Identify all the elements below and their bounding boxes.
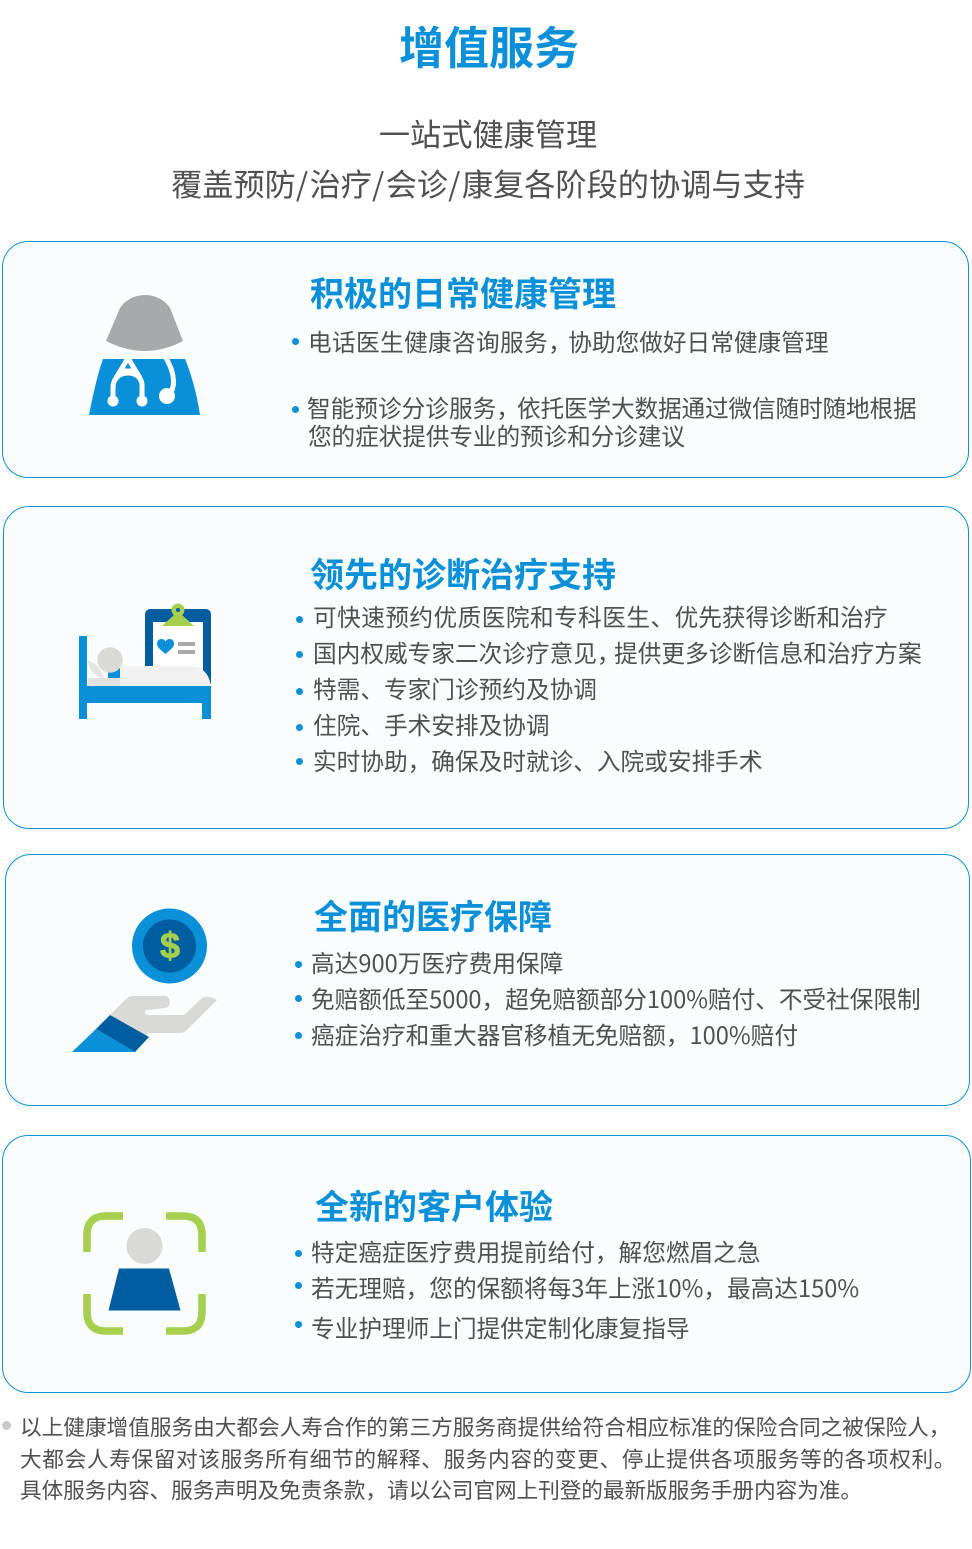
icon: hand with coin: $ bbox=[160, 925, 180, 966]
list: diagnosis and treatment: 住院、手术安排及协调 bbox=[313, 707, 550, 741]
footnote: 大都会人寿保留对该服务所有细节的解释、服务内容的变更、停止提供各项服务等的各项权利。 bbox=[20, 1442, 956, 1474]
subtitle: 覆盖预防/治疗/会诊/康复各阶段的协调与支持 bbox=[171, 160, 805, 205]
list: customer experience bbox=[295, 1234, 859, 1344]
panel: diagnosis and treatment bbox=[3, 506, 969, 829]
panel: customer experience bbox=[2, 1135, 971, 1393]
panel: daily health management bbox=[2, 241, 969, 478]
icon: patient in bed bbox=[79, 604, 211, 719]
icon: doctor bbox=[89, 295, 200, 415]
list: medical coverage: 免赔额低至5000，超免赔额部分100%赔付、不受社保限制 bbox=[311, 981, 921, 1015]
heading: medical coverage: 全面的医疗保障 bbox=[314, 890, 552, 939]
list: diagnosis and treatment: 可快速预约优质医院和专科医生、优先获得诊断和治疗 bbox=[313, 599, 888, 633]
icon: person in frame bbox=[83, 1212, 206, 1335]
list: diagnosis and treatment: 特需、专家门诊预约及协调 bbox=[313, 671, 597, 705]
list: customer experience: 若无理赔，您的保额将每3年上涨10%，最高达150% bbox=[311, 1270, 859, 1304]
list: customer experience: 专业护理师上门提供定制化康复指导 bbox=[311, 1310, 690, 1344]
list: diagnosis and treatment bbox=[296, 599, 922, 777]
list: daily health management: 智能预诊分诊服务，依托医学大数据通过微信随时随地根据 bbox=[307, 390, 917, 424]
heading: customer experience: 全新的客户体验 bbox=[315, 1180, 553, 1229]
heading: diagnosis and treatment: 领先的诊断治疗支持 bbox=[310, 548, 616, 597]
subtitle bbox=[171, 110, 805, 205]
footnote bbox=[20, 1411, 956, 1505]
list: medical coverage bbox=[295, 945, 921, 1051]
footnote: 具体服务内容、服务声明及免责条款，请以公司官网上刊登的最新版服务手册内容为准。 bbox=[20, 1474, 862, 1505]
list: daily health management: 电话医生健康咨询服务，协助您做好日常健康管理 bbox=[308, 324, 828, 358]
list: medical coverage: 高达900万医疗费用保障 bbox=[311, 945, 563, 979]
list: daily health management bbox=[292, 324, 917, 452]
list: daily health management: 您的症状提供专业的预诊和分诊建议 bbox=[308, 418, 685, 452]
list: diagnosis and treatment: 实时协助，确保及时就诊、入院或安排手术 bbox=[313, 743, 762, 777]
panel: medical coverage bbox=[5, 854, 970, 1106]
heading: daily health management: 积极的日常健康管理 bbox=[310, 267, 616, 316]
list: customer experience: 特定癌症医疗费用提前给付，解您燃眉之急 bbox=[311, 1234, 760, 1268]
footnote bullet bbox=[2, 1421, 11, 1430]
list: diagnosis and treatment: 国内权威专家二次诊疗意见，提供更多诊断信息和治疗方案 bbox=[313, 635, 922, 669]
subtitle: 一站式健康管理 bbox=[379, 110, 597, 155]
footnote: 以上健康增值服务由大都会人寿合作的第三方服务商提供给符合相应标准的保险合同之被保险人， bbox=[20, 1411, 950, 1442]
list: medical coverage: 癌症治疗和重大器官移植无免赔额，100%赔付 bbox=[311, 1017, 798, 1051]
icon: hand with coin bbox=[72, 908, 217, 1052]
title: 增值服务 bbox=[399, 12, 579, 77]
